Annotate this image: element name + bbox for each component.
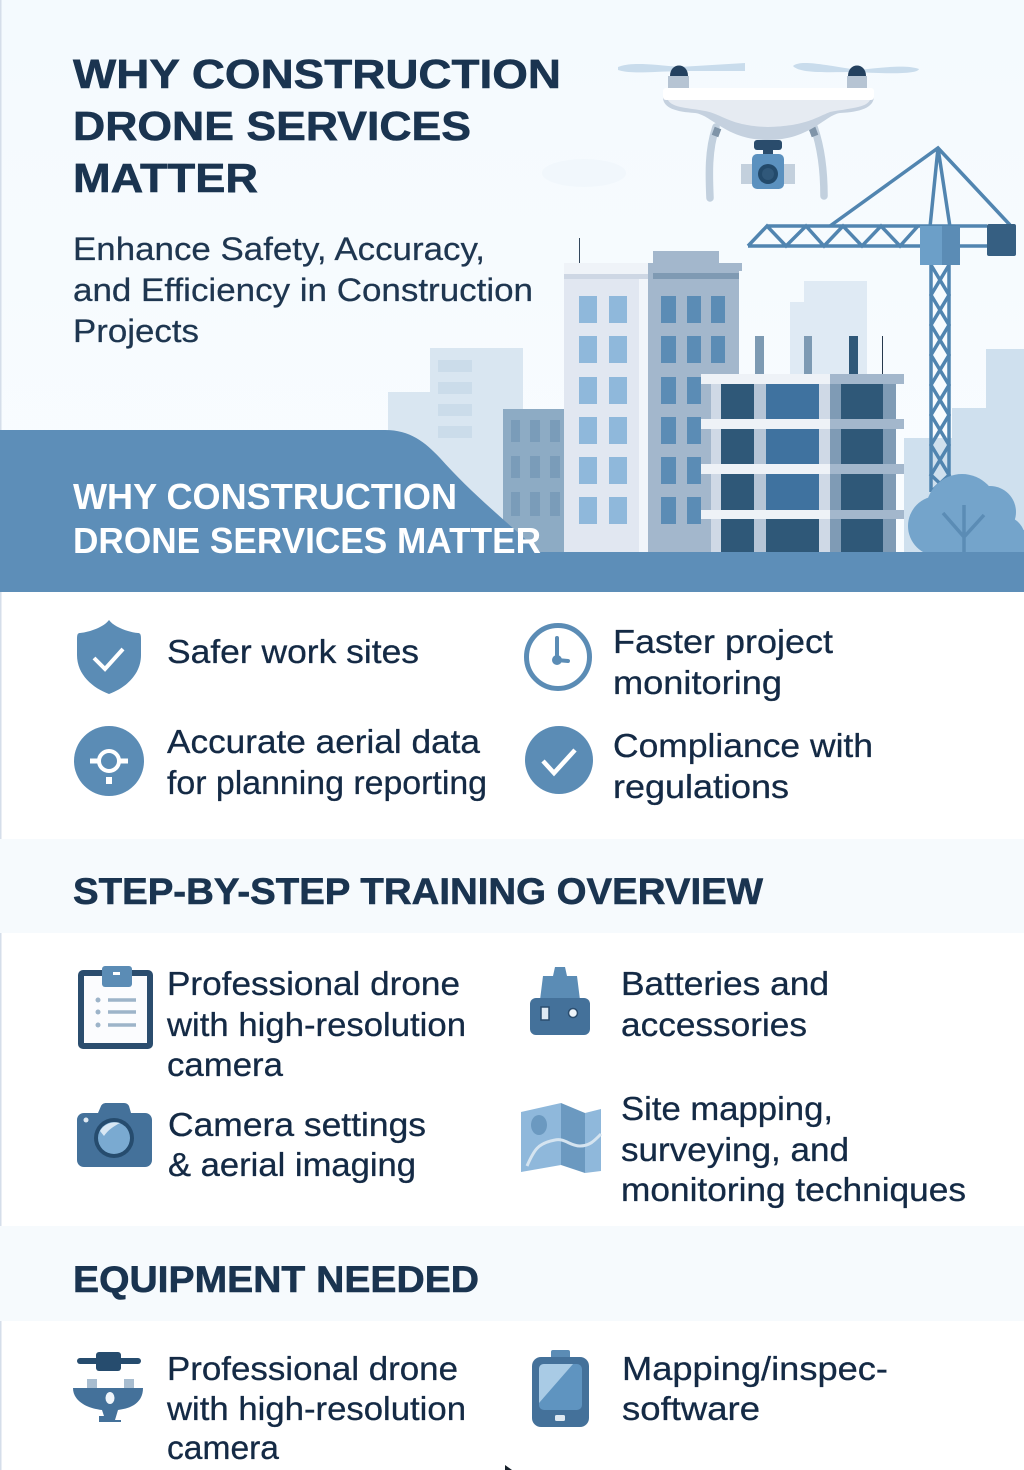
building: white tower bbox=[564, 238, 648, 552]
building under construction bbox=[701, 336, 904, 552]
camera gimbal bbox=[754, 140, 782, 150]
text: accurate aerial data bbox=[167, 723, 487, 801]
text: site mapping: monitoring techniques bbox=[621, 1171, 966, 1208]
icon: clock bbox=[526, 626, 590, 688]
blue banner shape bbox=[0, 430, 1024, 592]
text: professional drone bbox=[166, 1350, 466, 1466]
heading band: equipment needed: EQUIPMENT NEEDED bbox=[73, 1259, 479, 1300]
text: faster project monitoring: Faster project bbox=[613, 623, 833, 660]
title bbox=[73, 51, 561, 201]
rotors bbox=[618, 63, 919, 73]
body bbox=[663, 96, 874, 140]
text: site mapping: Site mapping, bbox=[621, 1090, 833, 1127]
text: accurate aerial data: Accurate aerial data bbox=[167, 723, 481, 760]
subtitle: Enhance Safety, Accuracy, bbox=[73, 231, 485, 267]
text: mapping software: software bbox=[622, 1390, 760, 1427]
building: grey tower bbox=[648, 251, 742, 552]
heading band: equipment needed bbox=[0, 1226, 1024, 1321]
icon: shield bbox=[77, 620, 141, 694]
text: professional drone: camera bbox=[167, 1046, 284, 1083]
text: batteries and accessories bbox=[621, 965, 829, 1043]
text: professional drone: camera bbox=[167, 1429, 280, 1466]
text: compliance with regulations bbox=[613, 727, 873, 805]
banner heading: WHY CONSTRUCTION bbox=[73, 476, 457, 517]
text: site mapping bbox=[621, 1090, 966, 1208]
icon: target bbox=[74, 726, 144, 796]
panel: benefits bbox=[74, 620, 873, 805]
text: faster project monitoring: monitoring bbox=[613, 664, 782, 701]
text: site mapping: surveying, and bbox=[621, 1131, 849, 1168]
hero illustration: skyline bbox=[388, 159, 1024, 552]
hero background bbox=[0, 0, 1024, 592]
text: mapping software: Mapping/inspec- bbox=[622, 1350, 888, 1387]
subtitle bbox=[73, 231, 533, 349]
banner heading bbox=[73, 476, 541, 561]
icon: camera bbox=[77, 1103, 152, 1167]
motors bbox=[668, 66, 867, 89]
panel: training overview bbox=[77, 965, 966, 1208]
heading band: training overview bbox=[0, 839, 1024, 933]
text: mapping software bbox=[622, 1350, 888, 1427]
hero illustration: tree bbox=[908, 474, 1024, 560]
panel: equipment needed bbox=[73, 1350, 888, 1466]
legs bbox=[709, 127, 824, 198]
subtitle: Projects bbox=[73, 313, 199, 349]
text: camera settings: & aerial imaging bbox=[168, 1146, 416, 1183]
banner heading: DRONE SERVICES MATTER bbox=[73, 520, 541, 561]
text: professional drone: Professional drone bbox=[167, 1350, 458, 1387]
icon: battery bbox=[530, 967, 590, 1035]
hero illustration: crane bbox=[748, 148, 1016, 492]
hero illustration: drone bbox=[618, 63, 919, 198]
text: professional drone: with high-resolution bbox=[166, 1390, 466, 1427]
title: WHY CONSTRUCTION bbox=[73, 51, 561, 97]
text: professional drone: with high-resolution bbox=[166, 1006, 466, 1043]
icon: check circle bbox=[525, 726, 593, 794]
title: MATTER bbox=[73, 155, 258, 201]
icon: drone bbox=[73, 1352, 143, 1422]
icon: clipboard bbox=[81, 966, 150, 1046]
heading band: training overview: STEP-BY-STEP TRAINING OVERVIEW bbox=[73, 871, 763, 912]
title: DRONE SERVICES bbox=[73, 103, 471, 149]
text: compliance with regulations: Compliance with bbox=[613, 727, 873, 764]
text: batteries and accessories: accessories bbox=[621, 1006, 807, 1043]
subtitle: and Efficiency in Construction bbox=[73, 272, 533, 308]
text: professional drone bbox=[166, 965, 466, 1083]
text: professional drone: Professional drone bbox=[167, 965, 460, 1002]
text: accurate aerial data: for planning reporting bbox=[167, 764, 487, 801]
icon: map bbox=[521, 1103, 601, 1173]
cursor fragment bbox=[505, 1465, 512, 1470]
text: camera settings: Camera settings bbox=[168, 1106, 426, 1143]
text: camera settings bbox=[168, 1106, 426, 1183]
text: batteries and accessories: Batteries and bbox=[621, 965, 829, 1002]
text: compliance with regulations: regulations bbox=[613, 768, 789, 805]
icon: tablet bbox=[532, 1350, 589, 1427]
text: faster project monitoring bbox=[613, 623, 833, 701]
text: safer work sites: Safer work sites bbox=[167, 633, 419, 670]
